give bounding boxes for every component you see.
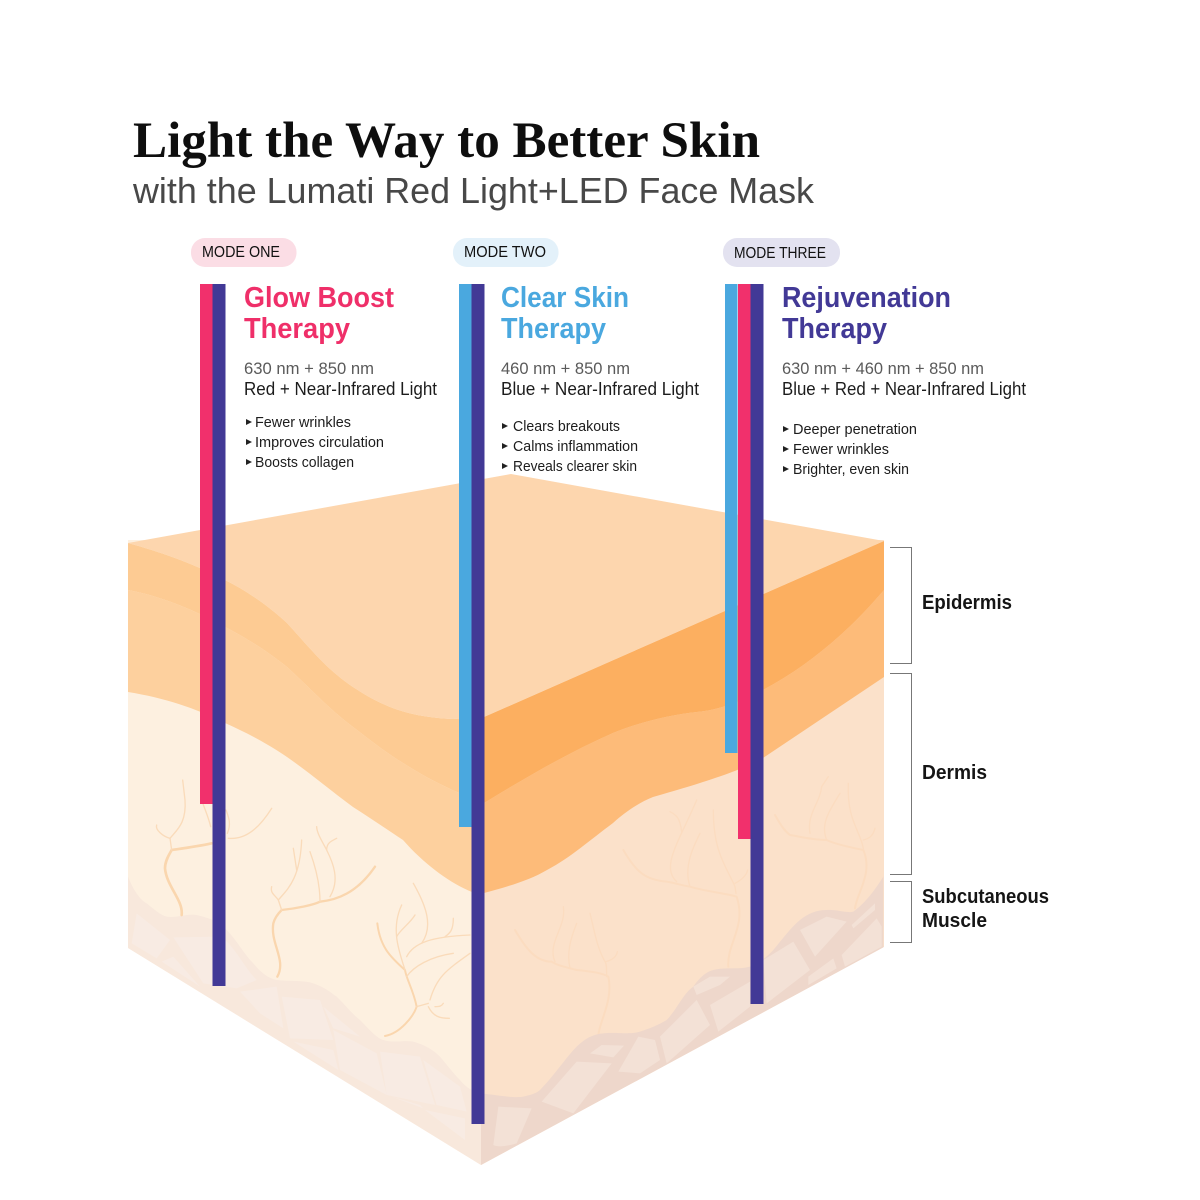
mode three benefits: Fewer wrinkles	[793, 441, 889, 458]
mode three benefits: Brighter, even skin	[793, 461, 909, 478]
mode two badge	[453, 238, 558, 267]
left face base dermis	[128, 540, 472, 1090]
mode two heading: Therapy	[501, 313, 606, 345]
right muscle layer	[480, 877, 883, 1167]
right epidermis layer lower	[484, 590, 884, 893]
left epidermis layer upper	[128, 543, 459, 793]
mode one heading: Glow Boost	[244, 282, 394, 314]
subcutaneous muscle label: Muscle	[922, 910, 987, 932]
subcutaneous muscle bracket	[890, 882, 912, 942]
title: Light the Way to Better Skin	[133, 113, 760, 169]
mode two wavelength: 460 nm + 850 nm	[501, 359, 630, 378]
mode one heading	[244, 282, 394, 345]
skin cross-section diagram	[128, 474, 884, 1170]
left epidermis layer lower	[128, 590, 484, 893]
mode one badge: MODE ONE	[202, 244, 280, 261]
dermis label: Dermis	[922, 762, 987, 784]
mode three light type: Blue + Red + Near-Infrared Light	[782, 379, 1026, 399]
left muscle cells	[132, 913, 467, 1140]
mode two benefits: Clears breakouts	[513, 418, 620, 435]
mode one heading: Therapy	[244, 313, 350, 345]
dermis bracket	[890, 674, 912, 874]
skin layer labels	[890, 548, 1049, 942]
red light bar	[200, 284, 213, 804]
near-infrared light bar	[750, 284, 764, 1004]
mode three benefits: Deeper penetration	[793, 421, 917, 438]
mode two badge: MODE TWO	[464, 244, 546, 261]
mode two benefits: Reveals clearer skin	[513, 458, 637, 475]
mode two light type: Blue + Near-Infrared Light	[501, 379, 699, 399]
near-infrared light bar	[472, 284, 484, 1124]
infographic canvas	[128, 122, 1048, 1165]
mode two column	[453, 238, 699, 1124]
left muscle layer	[128, 780, 482, 1167]
mode three heading: Rejuvenation	[782, 282, 951, 314]
mode three heading	[782, 282, 951, 345]
mode three column	[723, 238, 1026, 1004]
mode one benefits	[246, 414, 384, 471]
subcutaneous muscle label	[922, 886, 1049, 932]
right face base dermis	[481, 540, 884, 1170]
mode three badge	[723, 238, 840, 267]
subcutaneous muscle label: Subcutaneous	[922, 886, 1049, 908]
near-infrared light bar	[212, 284, 226, 986]
epidermis label: Epidermis	[922, 592, 1012, 614]
epidermis bracket	[890, 548, 912, 664]
mode three badge: MODE THREE	[734, 245, 826, 262]
red light bar	[738, 284, 751, 839]
mode one column	[191, 238, 437, 986]
mode two benefits	[502, 418, 638, 475]
mode one benefits: Fewer wrinkles	[255, 414, 351, 431]
blue light bar	[459, 284, 472, 827]
mode one badge	[191, 238, 296, 267]
right epidermis layer upper	[484, 541, 884, 803]
left face layers	[128, 540, 484, 1170]
right veins	[480, 777, 883, 1167]
right face layers	[480, 540, 884, 1170]
right muscle cells	[493, 903, 882, 1146]
mode three benefits	[783, 421, 917, 478]
mode one benefits: Improves circulation	[255, 434, 384, 451]
mode three heading: Therapy	[782, 313, 887, 345]
top surface of skin	[128, 474, 884, 719]
mode one light type: Red + Near-Infrared Light	[244, 379, 437, 399]
mode one wavelength: 630 nm + 850 nm	[244, 359, 374, 378]
mode two benefits: Calms inflammation	[513, 438, 638, 455]
mode two heading: Clear Skin	[501, 282, 629, 314]
left veins	[156, 780, 470, 1036]
mode one benefits: Boosts collagen	[255, 454, 354, 471]
mode two heading	[501, 282, 629, 345]
blue light bar	[725, 284, 738, 753]
subtitle: with the Lumati Red Light+LED Face Mask	[132, 170, 815, 211]
mode three wavelength: 630 nm + 460 nm + 850 nm	[782, 359, 984, 378]
